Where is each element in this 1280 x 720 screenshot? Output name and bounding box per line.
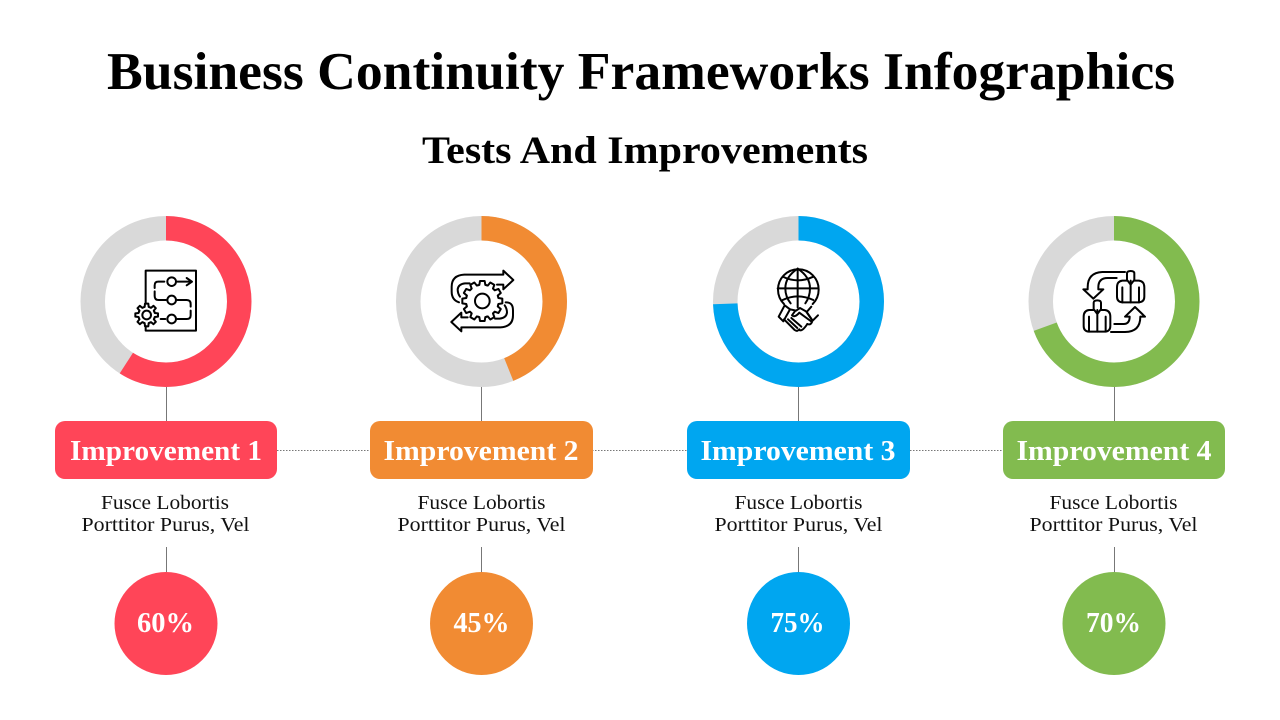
description 1: Porttitor Purus, Vel: [82, 515, 250, 536]
icon: globe and handshake: [778, 269, 819, 331]
description 2: Fusce Lobortis: [418, 493, 546, 514]
description 3: [714, 493, 883, 536]
donut chart: 70%: [1041, 228, 1187, 375]
column: improvement 1: [55, 228, 277, 675]
description 3: Porttitor Purus, Vel: [714, 515, 883, 536]
percentage badge: 70%: 70%: [1086, 607, 1141, 639]
icon: process flow document with gear: [135, 271, 196, 331]
label: improvement 2: Improvement 2: [384, 435, 578, 467]
percentage badge: 70%: [1062, 572, 1166, 675]
label: improvement 1: [55, 421, 277, 479]
column: improvement 3: [687, 228, 910, 675]
subtitle: Tests And Improvements: [422, 129, 868, 172]
label: improvement 2: [370, 421, 593, 479]
title: Business Continuity Frameworks Infographics: [107, 43, 1175, 101]
icon: two people exchanging positions: [1083, 271, 1145, 332]
description 2: [398, 493, 566, 536]
percentage badge: 75%: [747, 572, 850, 675]
description 1: Fusce Lobortis: [101, 493, 229, 514]
label: improvement 3: [687, 421, 910, 479]
column: improvement 4: [1003, 228, 1225, 675]
label: improvement 4: [1003, 421, 1225, 479]
column: improvement 2: [370, 228, 593, 675]
description 4: Porttitor Purus, Vel: [1030, 515, 1198, 536]
label: improvement 4: Improvement 4: [1016, 435, 1212, 467]
percentage badge: 60%: 60%: [137, 607, 194, 639]
percentage badge: 60%: [114, 572, 218, 675]
description 3: Fusce Lobortis: [734, 493, 862, 514]
donut chart: 45%: [408, 228, 555, 375]
description 4: [1030, 493, 1198, 536]
icon: gear with cycle arrows: [451, 271, 513, 331]
percentage badge: 45%: 45%: [454, 607, 510, 639]
description 4: Fusce Lobortis: [1050, 493, 1178, 514]
donut chart: 75%: [725, 228, 872, 375]
percentage badge: 75%: 75%: [770, 607, 824, 639]
label: improvement 1: Improvement 1: [70, 435, 262, 467]
description 2: Porttitor Purus, Vel: [398, 515, 566, 536]
donut chart: 60%: [93, 228, 239, 375]
description 1: [82, 493, 250, 536]
percentage badge: 45%: [430, 572, 533, 675]
label: improvement 3: Improvement 3: [700, 435, 896, 467]
